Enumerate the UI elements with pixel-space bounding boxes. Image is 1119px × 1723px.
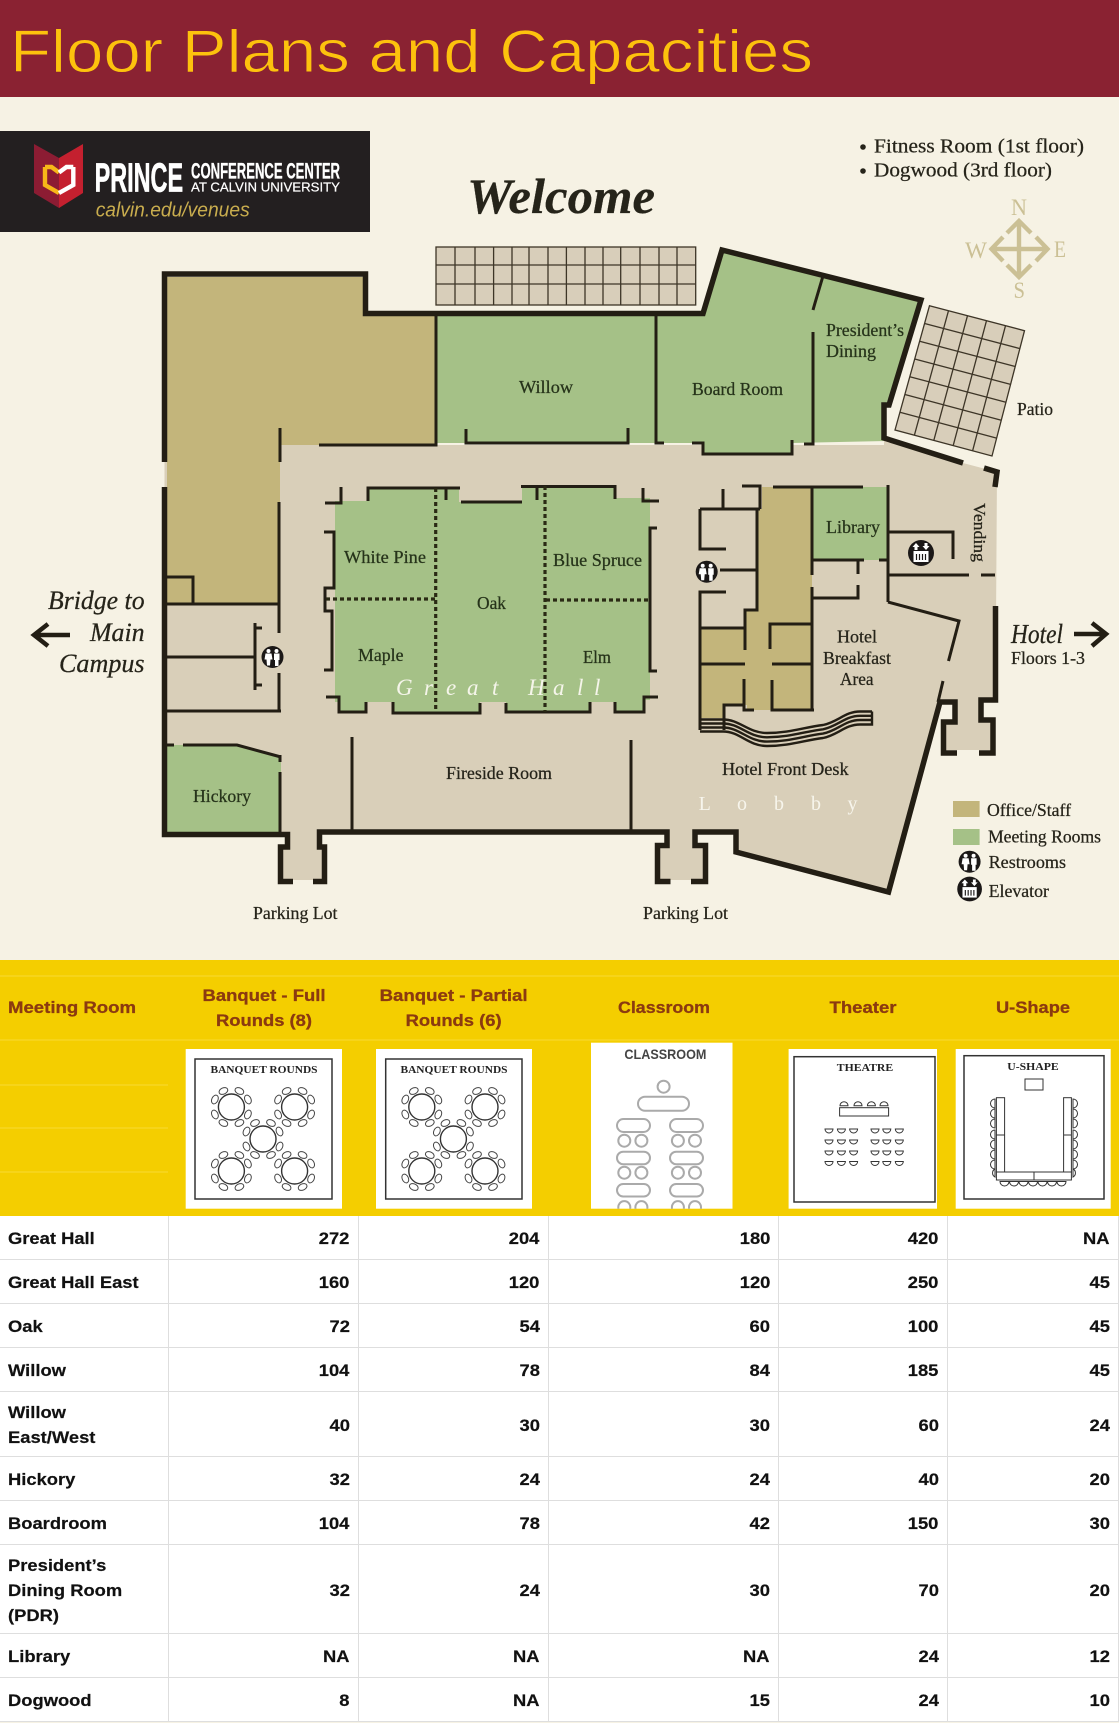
exterior walls [164,250,997,892]
bridge to main campus label: Main [89,618,145,647]
logo block: AT CALVIN UNIVERSITY [191,181,341,195]
capacity table: 42 [750,1514,770,1533]
room labels: Parking Lot [253,903,338,923]
capacity table: 272 [319,1229,350,1248]
room labels: Breakfast [823,648,891,668]
room labels: Blue Spruce [553,550,642,570]
capacity table: 24 [750,1470,770,1489]
capacity table: 120 [739,1273,770,1292]
diagram: classroom: CLASSROOM [624,1046,706,1062]
capacity table: NA [513,1691,540,1710]
capacity table: 32 [329,1580,350,1600]
capacity table: 78 [519,1514,540,1533]
logo block: PRINCE [95,155,183,201]
logo shield [34,144,83,208]
column headings: U-Shape [996,998,1070,1017]
capacity table: 30 [750,1580,770,1600]
column headings: Rounds (8) [216,1011,312,1030]
logo block [0,131,370,232]
capacity table: 185 [908,1361,938,1380]
movable partitions [326,486,650,712]
capacity table: 78 [519,1361,540,1380]
room labels: Willow [519,377,573,397]
capacity table: 54 [519,1317,540,1336]
diagram: banquet full: BANQUET ROUNDS [210,1064,318,1076]
other floors note: Fitness Room (1st floor) [874,136,1084,158]
office and staff area west [167,277,436,603]
room labels: Elm [583,647,611,667]
capacity table: 104 [319,1361,350,1380]
great hall label: GreatHall [396,675,600,700]
column headings: Meeting Room [8,998,136,1017]
room labels: White Pine [344,547,426,567]
bridge to main campus label: Bridge to [48,586,145,615]
other floors note: Dogwood (3rd floor) [874,160,1052,182]
room labels: President’s [826,320,904,340]
room labels: Maple [358,645,404,665]
capacity table [0,1216,1119,1722]
capacity table: 40 [329,1416,350,1434]
capacity table: East/West [8,1428,95,1447]
capacity table: 180 [739,1229,770,1248]
capacity table: 24 [918,1691,938,1710]
capacity table: 30 [750,1416,770,1434]
room labels [193,320,1053,923]
room labels: Hotel [837,627,877,647]
capacity table: 72 [329,1317,350,1336]
patio north [436,247,696,305]
room labels: Area [840,669,874,689]
capacity table: 40 [918,1470,938,1489]
capacity table: 420 [908,1229,938,1248]
bridge to main campus label: Campus [59,649,145,678]
capacity table: 45 [1090,1361,1110,1380]
hotel label: Floors 1-3 [1011,648,1085,668]
header band [0,0,1119,97]
diagram: banquet full [186,1049,342,1209]
hotel label [1010,619,1085,668]
legend: Office/Staff [987,800,1071,820]
office and staff area hotel core [700,487,812,718]
logo block: CONFERENCE CENTER [191,158,340,183]
capacity table: 150 [908,1514,938,1533]
capacity table: NA [323,1647,350,1666]
column headings: Classroom [618,998,710,1017]
room labels: Board Room [692,379,783,399]
room labels: Patio [1017,399,1053,419]
room: hickory [167,745,281,832]
icon: restroom west [262,646,284,668]
capacity table: 24 [918,1647,938,1666]
capacity table: Library [8,1647,70,1666]
column headings [8,986,1070,1030]
room: willow [436,316,656,443]
column headings: Banquet - Partial [380,986,528,1005]
compass: E [1054,237,1066,262]
floor plan [164,250,1053,923]
capacity table: 15 [750,1691,770,1710]
capacity table: Boardroom [8,1514,107,1533]
room labels: Hotel Front Desk [722,759,849,779]
capacity table: Great Hall [8,1229,95,1248]
capacity table: 24 [519,1470,540,1489]
diagram: theatre: THEATRE [837,1062,893,1074]
title: Floor Plans and Capacities [10,18,813,85]
capacity table header band [0,960,1119,1216]
capacity table: 30 [1090,1514,1110,1533]
arrow: to hotel [1074,623,1106,646]
capacity table: 45 [1090,1273,1110,1292]
capacity table: 24 [1090,1416,1110,1434]
capacity table: Great Hall East [8,1273,139,1292]
room labels: Hickory [193,786,251,806]
capacity table: 12 [1090,1647,1110,1666]
capacity table: 70 [918,1580,938,1600]
capacity table: President’s [8,1556,106,1574]
capacity table: 250 [908,1273,938,1292]
capacity table: 104 [319,1514,350,1533]
capacity table: 60 [918,1416,938,1434]
hotel label: Hotel [1010,619,1063,649]
diagram: theatre [789,1049,937,1209]
capacity table: 20 [1090,1470,1110,1489]
diagram: u-shape: U-SHAPE [1007,1061,1059,1073]
legend: Restrooms [989,852,1066,872]
front desk curved stairs [700,712,872,746]
room labels: Library [826,517,880,537]
capacity table: Willow [8,1361,66,1380]
logo block: calvin.edu/venues [96,200,250,222]
patio east [895,306,1024,456]
diagram: u-shape [956,1049,1111,1209]
legend: Meeting Rooms [988,827,1101,847]
capacity table: 60 [750,1317,770,1336]
lobby label: Lobby [699,793,858,815]
compass: W [965,238,987,263]
room labels: Oak [477,593,506,613]
diagram: classroom [591,1043,732,1209]
compass: S [1014,278,1025,303]
other floors note [860,136,1084,182]
capacity table: NA [513,1647,540,1666]
arrow: to main campus [34,624,70,646]
capacity table: 30 [519,1416,540,1434]
column headings: Theater [830,998,897,1017]
capacity table: Dining Room [8,1580,122,1600]
room: board room and president's dining [656,250,921,453]
capacity table: 84 [750,1361,770,1380]
capacity table: 120 [509,1273,540,1292]
building floor (lobby and corridors) [164,438,997,892]
capacity table: 20 [1090,1580,1110,1600]
room labels: Vending [970,503,989,563]
room: great hall [335,487,650,713]
room labels: Dining [826,341,876,361]
capacity table: Dogwood [8,1691,92,1710]
capacity table: 24 [519,1580,540,1600]
capacity table: 10 [1090,1691,1110,1710]
capacity table: NA [743,1647,770,1666]
icon: restroom core [696,561,718,583]
room: library [812,487,887,560]
icon: elevator [908,540,934,566]
bridge to main campus label [48,586,145,678]
compass [965,195,1066,303]
legend: Elevator [989,881,1049,901]
column headings: Rounds (6) [406,1011,502,1030]
legend [953,800,1101,901]
capacity table: 100 [908,1317,938,1336]
capacity table: Willow [8,1403,66,1422]
compass: N [1011,195,1027,220]
capacity table: NA [1083,1229,1110,1248]
capacity table: 204 [509,1229,540,1248]
diagram: banquet partial: BANQUET ROUNDS [400,1064,508,1076]
capacity table: 160 [319,1273,350,1292]
capacity table: Hickory [8,1470,75,1489]
capacity table: Oak [8,1317,43,1336]
welcome heading: Welcome [467,168,655,224]
interior walls [164,276,995,832]
capacity table: 45 [1090,1317,1110,1336]
column headings: Banquet - Full [202,986,326,1005]
capacity table: (PDR) [8,1606,59,1624]
capacity table: 8 [339,1691,350,1710]
room labels: Fireside Room [446,763,552,783]
capacity table: 32 [329,1470,350,1489]
diagram: banquet partial [376,1049,532,1209]
room labels: Parking Lot [643,903,728,923]
